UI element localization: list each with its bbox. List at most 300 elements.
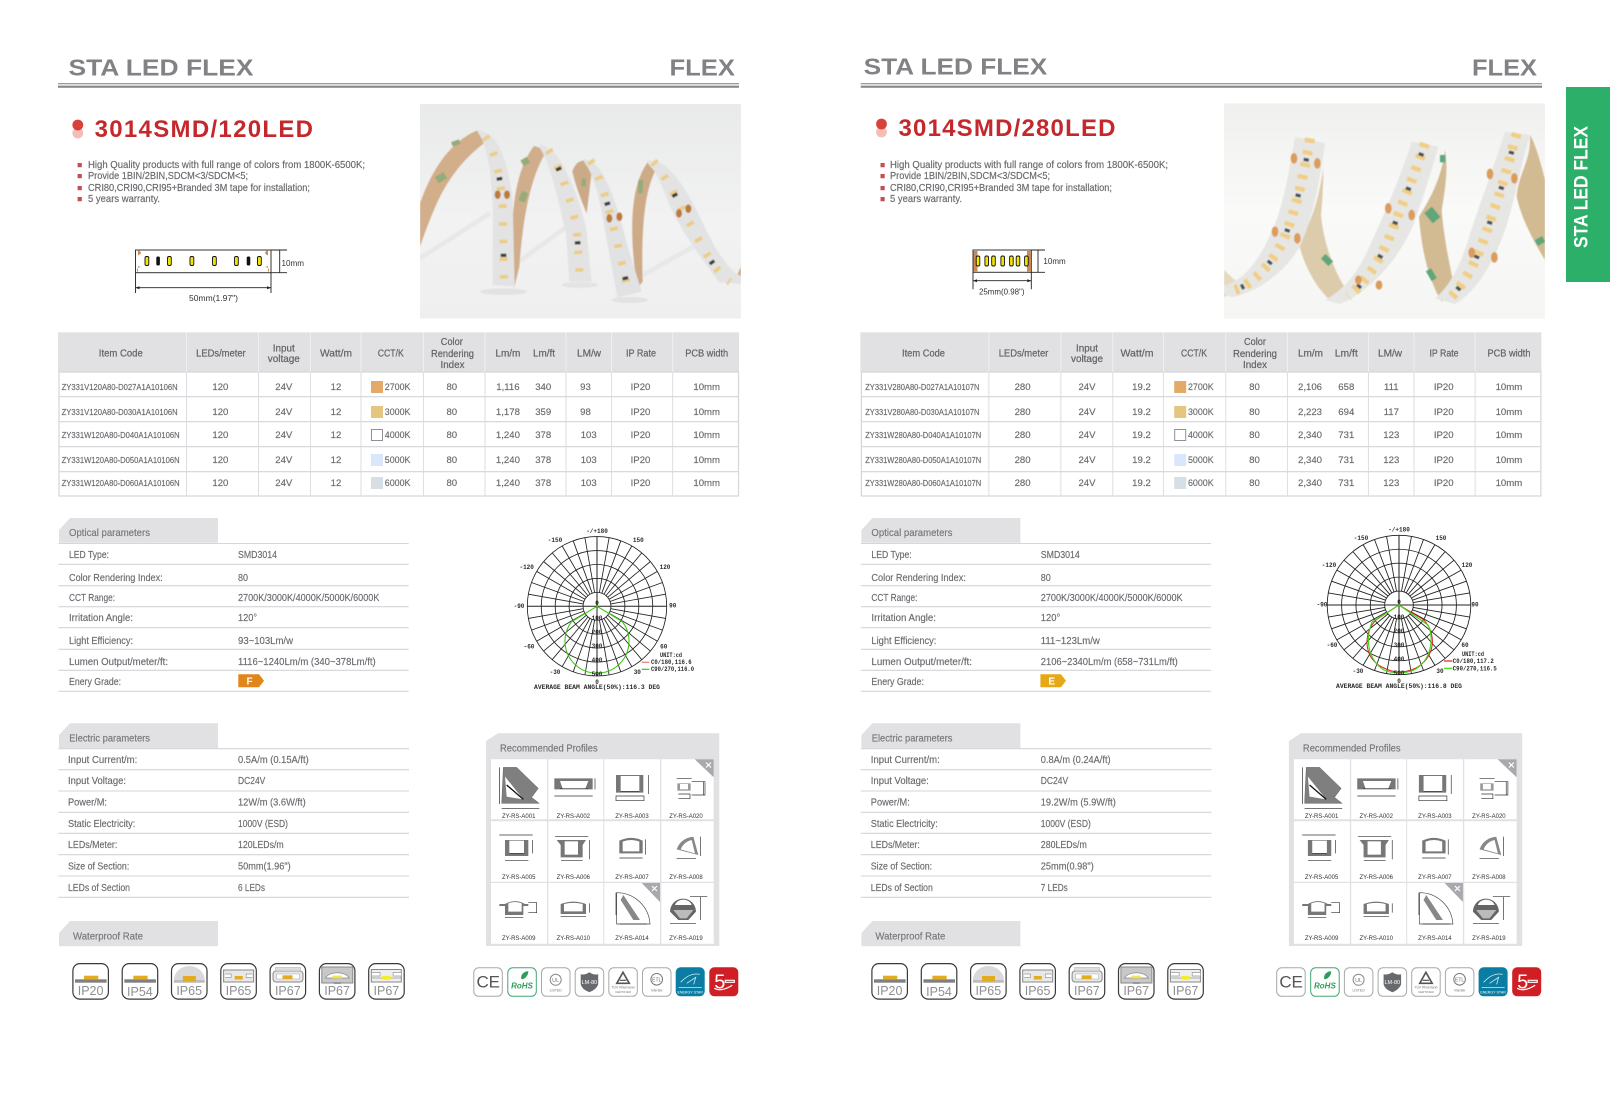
table row 2700K: 111 bbox=[1384, 382, 1399, 393]
icon: Energy Star: ENERGY STAR bbox=[677, 990, 703, 994]
page 1 feature bullet list: 5 years warranty. bbox=[88, 194, 160, 205]
profile ZY-RS-A003: ZY-RS-A003 bbox=[615, 814, 649, 820]
table row 6000K: 24V bbox=[275, 478, 293, 489]
page 2 feature bullet list: Provide 1BIN/2BIN,SDCM<3/SDCM<5; bbox=[890, 171, 1050, 182]
table row 6000K bbox=[62, 477, 720, 489]
page 2 polar light distribution chart: C0/180,117.2 bbox=[1453, 658, 1494, 665]
table row 6000K: 80 bbox=[1249, 478, 1260, 489]
table row 6000K: 12 bbox=[331, 478, 341, 489]
page 1 polar light distribution chart: 0 bbox=[595, 679, 599, 686]
icon: UL listed: UL bbox=[552, 978, 559, 984]
page 2 panel: optical parameters: 120° bbox=[1041, 613, 1060, 624]
page 2 polar light distribution chart: -/+180 bbox=[1388, 526, 1410, 534]
page 1 polar light distribution chart: -150 bbox=[548, 537, 563, 544]
page 2 certification icons bbox=[1277, 967, 1541, 996]
table header row: PCB width bbox=[685, 349, 728, 360]
icon: ETL: ETL bbox=[652, 977, 662, 983]
page 2 panel: electric parameters: Size of Section: bbox=[871, 862, 932, 873]
page 2 polar light distribution chart: 200 bbox=[1394, 628, 1405, 635]
table row 2700K: 120 bbox=[212, 382, 228, 393]
icon: UL listed: LISTED bbox=[550, 988, 562, 992]
page 1 polar light distribution chart: -60 bbox=[524, 644, 535, 650]
table header row: Lm/ft bbox=[533, 349, 555, 360]
table row 5000K: 280 bbox=[1015, 455, 1031, 466]
profile ZY-RS-A001 bbox=[1303, 767, 1342, 820]
page 1 IP rating icons bbox=[73, 964, 404, 999]
page 2 panel: electric parameters: DC24V bbox=[1041, 776, 1068, 787]
table row 6000K: 19.2 bbox=[1132, 478, 1151, 489]
table row 3000K: 694 bbox=[1338, 407, 1355, 418]
page 2 product photo: LED strip 280 bbox=[1224, 103, 1545, 319]
page 1 panel: optical parameters: CCT Range: bbox=[69, 593, 115, 604]
page 1 panel: optical parameters: 2700K/3000K/4000K/5000K/6000K bbox=[238, 593, 380, 604]
table row 4000K: 103 bbox=[581, 430, 597, 441]
page 2 strip section diagram 25mm: 25mm(0.98") bbox=[979, 286, 1025, 296]
energy grade badge F bbox=[238, 674, 264, 688]
page 2 waterproof rate heading bbox=[861, 921, 1020, 946]
table row 3000K: 10mm bbox=[693, 407, 720, 418]
icon: RoHS: RoHS bbox=[1314, 981, 1336, 990]
table header row: CCT/K bbox=[1181, 349, 1207, 360]
profile ZY-RS-A020 with not-suitable corner bbox=[669, 759, 714, 820]
table row 5000K: 12 bbox=[331, 455, 341, 466]
page 1 panel: electric parameters: 0.5A/m (0.15A/ft) bbox=[238, 755, 309, 766]
page 2 panel: optical parameters: CCT Range: bbox=[871, 593, 917, 604]
table row 4000K: 24V bbox=[1078, 430, 1096, 441]
icon: 5 year warranty bbox=[1512, 967, 1541, 996]
table row 6000K: 103 bbox=[581, 478, 597, 489]
icon: IP67 arc: IP67 bbox=[324, 984, 350, 998]
profile ZY-RS-A005 bbox=[1302, 835, 1339, 881]
page 2 panel: electric parameters: 19.2W/m (5.9W/ft) bbox=[1041, 798, 1116, 809]
page 2 polar light distribution chart: -90 bbox=[1317, 602, 1328, 608]
icon: ETL bbox=[1445, 968, 1474, 996]
profile ZY-RS-A010: ZY-RS-A010 bbox=[557, 936, 591, 942]
page 1 panel: electric parameters: LEDs of Section bbox=[68, 883, 130, 894]
page 2 panel: electric parameters: 25mm(0.98") bbox=[1041, 862, 1094, 873]
page 2 strip section diagram 25mm bbox=[973, 250, 1066, 296]
page 1 panel: optical parameters: SMD3014 bbox=[238, 550, 277, 561]
energy grade badge E bbox=[1040, 674, 1066, 688]
icon: IP67 channel: IP67 bbox=[1074, 984, 1100, 998]
profile ZY-RS-A005 bbox=[499, 835, 536, 881]
table row 4000K: 120 bbox=[212, 430, 228, 441]
icon: CE: E bbox=[489, 972, 500, 991]
profile ZY-RS-A014 with not-suitable corner: ZY-RS-A014 bbox=[615, 936, 649, 942]
table row 2700K: 2700K bbox=[1188, 382, 1214, 393]
page 2 panel: optical parameters: LED Type: bbox=[871, 550, 912, 561]
table row 5000K: 378 bbox=[535, 455, 551, 466]
table row 5000K: IP20 bbox=[1434, 455, 1454, 466]
table header row: voltage bbox=[1071, 354, 1103, 365]
icon: IP65 profile bbox=[1020, 964, 1055, 999]
page 1 panel: optical parameters: Lumen Output/meter/ft: bbox=[69, 657, 168, 668]
page 1 panel: electric parameters: Static Electricity: bbox=[68, 819, 135, 830]
icon: IP20 bbox=[73, 964, 108, 999]
icon: IP65 profile bbox=[221, 964, 256, 999]
page 2 panel: optical parameters: Irritation Angle: bbox=[871, 613, 936, 624]
profile ZY-RS-A008: ZY-RS-A008 bbox=[669, 875, 703, 881]
table row 6000K: 280 bbox=[1015, 478, 1031, 489]
profile ZY-RS-A003 bbox=[1418, 775, 1452, 820]
icon: TUV triangle: CERTIFIED bbox=[615, 990, 632, 994]
page 2 feature bullet list bbox=[880, 160, 1168, 205]
icon: IP65 dome: IP65 bbox=[975, 984, 1001, 998]
table row 3000K: 24V bbox=[275, 407, 293, 418]
page 1 polar light distribution chart: 400 bbox=[592, 657, 603, 664]
page 2 panel: electric parameters: 7 LEDs bbox=[1041, 883, 1068, 894]
page 1 panel: optical parameters: 1116~1240Lm/m (340~378Lm/ft) bbox=[238, 657, 376, 668]
page 1 polar light distribution chart: C0/180,116.6 bbox=[651, 659, 692, 666]
table row 3000K bbox=[865, 406, 1522, 418]
page 1 panel: optical parameters: LED Type: bbox=[69, 550, 109, 561]
profile ZY-RS-A009 bbox=[499, 901, 537, 942]
page 1 polar light distribution chart: 90 bbox=[669, 602, 677, 610]
table row 2700K: 80 bbox=[1249, 382, 1260, 393]
table row 3000K: 3000K bbox=[1188, 407, 1214, 418]
page 1 panel: recommended profiles: Recommended Profiles bbox=[500, 743, 598, 755]
page 2 panel: electric parameters: Power/M: bbox=[871, 798, 910, 809]
page 2 polar light distribution chart: -30 bbox=[1353, 668, 1364, 675]
table header row: LEDs/meter bbox=[999, 349, 1049, 360]
table row 6000K bbox=[865, 477, 1522, 489]
profile ZY-RS-A009: ZY-RS-A009 bbox=[502, 936, 536, 942]
page 2 panel: optical parameters: Lumen Output/meter/ft: bbox=[871, 657, 972, 668]
table row 3000K: 359 bbox=[535, 407, 551, 418]
page 2 polar light distribution chart: C90/270,116.5 bbox=[1453, 665, 1497, 672]
page 2 panel: electric parameters: Input Current/m: bbox=[871, 755, 940, 766]
icon: IP54: IP54 bbox=[127, 985, 153, 999]
table header row: Rendering bbox=[431, 349, 474, 360]
page 2 header: STA LED FLEX / FLEX bbox=[861, 54, 1542, 88]
table row 3000K: 280 bbox=[1015, 407, 1031, 418]
profile ZY-RS-A020 with not-suitable corner bbox=[1472, 759, 1517, 820]
icon: ETL: Intertek bbox=[651, 988, 663, 992]
icon: TUV triangle bbox=[609, 968, 637, 996]
page 2 panel: electric parameters bbox=[861, 723, 1211, 897]
page 1 polar light distribution chart: AVERAGE BEAM ANGLE(50%):116.3 DEG bbox=[534, 684, 660, 691]
page 2 panel: optical parameters: 111~123Lm/w bbox=[1041, 636, 1100, 647]
profile ZY-RS-A019: ZY-RS-A019 bbox=[1472, 936, 1506, 942]
profile ZY-RS-A010 bbox=[557, 902, 591, 942]
table row 2700K bbox=[62, 381, 720, 393]
table row 3000K: ZY331V280A80-D030A1A10107N bbox=[865, 407, 980, 417]
table row 5000K: ZY331W280A80-D050A1A10107N bbox=[865, 455, 981, 465]
table row 6000K: 6000K bbox=[1188, 478, 1214, 489]
table row 4000K: ZY331W280A80-D040A1A10107N bbox=[865, 430, 981, 440]
icon: CE: E bbox=[1292, 972, 1303, 991]
table header row: CCT/K bbox=[378, 349, 404, 360]
table row 2700K: 24V bbox=[1078, 382, 1096, 393]
table row 6000K: ZY331W280A80-D060A1A10107N bbox=[865, 478, 981, 488]
table row 2700K: 1,116 bbox=[496, 382, 520, 393]
table row 5000K: 123 bbox=[1383, 455, 1399, 466]
profile ZY-RS-A008 bbox=[669, 837, 703, 881]
table header row: Item Code bbox=[902, 349, 945, 360]
table row 4000K: 24V bbox=[275, 430, 293, 441]
page 1 polar light distribution chart: 0 bbox=[595, 600, 599, 607]
page 1 panel: electric parameters: LEDs/Meter: bbox=[68, 840, 117, 851]
page 2 feature bullet list: CRI80,CRI90,CRI95+Branded 3M tape for installation; bbox=[890, 183, 1112, 194]
page 1 product photo: LED strip 120 bbox=[420, 104, 741, 319]
profile ZY-RS-A001: ZY-RS-A001 bbox=[502, 814, 536, 820]
table row 2700K: 10mm bbox=[693, 382, 720, 393]
table row 2700K: 280 bbox=[1015, 382, 1031, 393]
page 2 panel: optical parameters: SMD3014 bbox=[1041, 550, 1080, 561]
icon: IP67 arc: IP67 bbox=[1123, 984, 1149, 998]
side tab: STA LED FLEX: STA LED FLEX bbox=[1569, 125, 1592, 248]
page 1 polar light distribution chart: 60 bbox=[660, 644, 668, 650]
page 2 polar light distribution chart: 400 bbox=[1394, 656, 1405, 663]
table row 3000K: 10mm bbox=[1496, 407, 1522, 418]
table header row: LM/w bbox=[1378, 349, 1402, 360]
table row 6000K: 378 bbox=[535, 478, 551, 489]
table row 5000K bbox=[865, 454, 1522, 466]
page 1 feature bullet list bbox=[78, 160, 365, 205]
page 2 panel: electric parameters: Static Electricity: bbox=[871, 819, 938, 830]
table row 6000K: 2,340 bbox=[1298, 478, 1322, 489]
icon: IP65 profile: IP65 bbox=[1025, 984, 1051, 998]
icon: IP67 box bbox=[1168, 964, 1203, 999]
table row 4000K: IP20 bbox=[631, 430, 650, 441]
profile ZY-RS-A003: ZY-RS-A003 bbox=[1418, 814, 1452, 820]
profile ZY-RS-A009: ZY-RS-A009 bbox=[1305, 936, 1339, 942]
table header row: Watt/m bbox=[1121, 349, 1154, 360]
profile ZY-RS-A002: ZY-RS-A002 bbox=[1359, 814, 1394, 820]
page 2 panel: electric parameters: 280LEDs/m bbox=[1041, 840, 1087, 851]
page 2 panel: recommended profiles bbox=[1289, 733, 1522, 946]
page 1 feature bullet list: High Quality products with full range of colors from 1800K-6500K; bbox=[88, 160, 365, 171]
table row 2700K: 93 bbox=[580, 382, 591, 393]
page 1 strip section diagram 50mm bbox=[136, 250, 304, 303]
page 2 panel: optical parameters: Light Efficiency: bbox=[871, 636, 936, 647]
icon: RoHS bbox=[1311, 968, 1339, 996]
page 1 product heading: 3014SMD/120LED bbox=[95, 116, 313, 143]
table row 3000K bbox=[62, 406, 720, 418]
page 2 spec table bbox=[860, 332, 1541, 496]
icon: UL listed bbox=[1344, 968, 1373, 996]
table row 4000K: 378 bbox=[535, 430, 551, 441]
page 1 header: STA LED FLEX / FLEX: STA LED FLEX bbox=[68, 55, 254, 81]
page 2 polar light distribution chart: 150 bbox=[1436, 535, 1447, 542]
table row 2700K: 2700K bbox=[385, 382, 411, 393]
icon: IP65 dome bbox=[172, 964, 207, 999]
table row 5000K: ZY331W120A80-D050A1A10106N bbox=[62, 455, 180, 465]
energy grade badge F: F bbox=[246, 676, 253, 688]
page 1 strip section diagram 50mm: 10mm bbox=[282, 258, 304, 268]
table row 4000K: 4000K bbox=[385, 430, 411, 441]
table row 3000K: 3000K bbox=[385, 407, 411, 418]
page 1 polar light distribution chart: 150 bbox=[633, 537, 644, 544]
page 1 panel: optical parameters: Light Efficiency: bbox=[69, 636, 133, 647]
page 1 polar light distribution chart: 200 bbox=[592, 629, 603, 636]
profile ZY-RS-A003 bbox=[615, 775, 649, 820]
table row 3000K: 117 bbox=[1384, 407, 1399, 418]
page 1 panel: electric parameters: 120LEDs/m bbox=[238, 840, 284, 851]
page 1 feature bullet list: Provide 1BIN/2BIN,SDCM<3/SDCM<5; bbox=[88, 171, 248, 182]
table header row: LM/w bbox=[577, 349, 601, 360]
page 2 polar light distribution chart: AVERAGE BEAM ANGLE(50%):116.8 DEG bbox=[1336, 683, 1462, 690]
icon: CE: C bbox=[1279, 972, 1292, 991]
page 1 polar light distribution chart: 500 bbox=[592, 671, 603, 678]
table header row: Index bbox=[440, 360, 465, 371]
page 1 waterproof rate heading bbox=[59, 921, 218, 946]
profile ZY-RS-A020 with not-suitable corner: ZY-RS-A020 bbox=[1472, 814, 1506, 820]
table row 4000K: 1,240 bbox=[496, 430, 520, 441]
table header row: Index bbox=[1243, 360, 1268, 371]
page 1 header: STA LED FLEX / FLEX: FLEX bbox=[670, 55, 736, 81]
page 1 panel: optical parameters: 93~103Lm/w bbox=[238, 636, 294, 647]
table row 4000K: 12 bbox=[331, 430, 341, 441]
page 1 panel: optical parameters: Enery Grade: bbox=[69, 677, 121, 688]
icon: IP20: IP20 bbox=[78, 984, 104, 998]
table header row: PCB width bbox=[1488, 349, 1531, 360]
icon: IP20: IP20 bbox=[877, 984, 903, 998]
page 1 panel: recommended profiles bbox=[486, 733, 719, 946]
page 2 panel: electric parameters: 1000V (ESD) bbox=[1041, 819, 1091, 830]
page 1 spec table bbox=[58, 332, 739, 496]
table row 3000K: 1,178 bbox=[496, 407, 520, 418]
icon: RoHS: RoHS bbox=[511, 981, 534, 990]
icon: UL listed bbox=[542, 968, 570, 996]
page 1 panel: electric parameters: Power/M: bbox=[68, 798, 107, 809]
table row 3000K: 24V bbox=[1078, 407, 1096, 418]
table row 3000K: 80 bbox=[446, 407, 457, 418]
icon: Energy Star bbox=[676, 967, 705, 996]
table row 3000K: IP20 bbox=[1434, 407, 1454, 418]
profile ZY-RS-A002: ZY-RS-A002 bbox=[557, 814, 591, 820]
table row 5000K: 5000K bbox=[1188, 455, 1214, 466]
page 2 header: STA LED FLEX / FLEX: STA LED FLEX bbox=[864, 54, 1048, 80]
icon: IP65 dome: IP65 bbox=[176, 984, 202, 998]
icon: RoHS bbox=[508, 968, 536, 996]
page 1 polar light distribution chart bbox=[514, 528, 694, 691]
page 2 panel: electric parameters: LEDs of Section bbox=[871, 883, 933, 894]
icon: IP54 bbox=[921, 964, 957, 999]
table row 2700K: 19.2 bbox=[1132, 382, 1151, 393]
table row 2700K bbox=[865, 381, 1522, 393]
table row 6000K: 120 bbox=[212, 478, 228, 489]
page 1 panel: electric parameters: 50mm(1.96") bbox=[238, 862, 291, 873]
profile ZY-RS-A007 bbox=[615, 838, 649, 881]
table row 5000K: 80 bbox=[446, 455, 457, 466]
profile ZY-RS-A009 bbox=[1302, 901, 1340, 942]
page 2 polar light distribution chart: 120 bbox=[1462, 562, 1473, 569]
icon: IP67 channel bbox=[1069, 964, 1105, 999]
page 2 product heading: 3014SMD/280LED bbox=[898, 115, 1116, 142]
table row 5000K: 2,340 bbox=[1298, 455, 1322, 466]
table row 5000K: 731 bbox=[1338, 455, 1354, 466]
table row 6000K: 10mm bbox=[693, 478, 720, 489]
table row 5000K: IP20 bbox=[631, 455, 650, 466]
table row 6000K: 6000K bbox=[385, 478, 411, 489]
page 1 polar light distribution chart: -/+180 bbox=[586, 528, 608, 535]
table row 6000K: 1,240 bbox=[496, 478, 520, 489]
page 1 panel: electric parameters: DC24V bbox=[238, 776, 265, 787]
table row 4000K: 10mm bbox=[1496, 430, 1522, 441]
table header row: LEDs/meter bbox=[196, 349, 246, 360]
energy grade badge E: E bbox=[1048, 676, 1055, 688]
page 1 panel: electric parameters bbox=[58, 723, 409, 897]
profile ZY-RS-A014 with not-suitable corner bbox=[1418, 883, 1463, 942]
page 1 panel: optical parameters bbox=[58, 518, 409, 691]
table row 5000K: 120 bbox=[212, 455, 228, 466]
page 2 polar light distribution chart: -150 bbox=[1354, 535, 1369, 542]
icon: ETL bbox=[642, 968, 671, 996]
table header row: Input bbox=[1076, 343, 1098, 354]
page 1 panel: optical parameters: 120° bbox=[238, 613, 257, 624]
table row 5000K: 10mm bbox=[1496, 455, 1522, 466]
table row 4000K bbox=[865, 430, 1522, 441]
table header row bbox=[902, 337, 1531, 371]
table row 4000K: 2,340 bbox=[1298, 430, 1322, 441]
table row 6000K: 80 bbox=[446, 478, 457, 489]
page 2 polar light distribution chart: UNIT:cd bbox=[1462, 651, 1484, 658]
icon: IP67 channel bbox=[270, 964, 306, 999]
profile ZY-RS-A001 bbox=[500, 767, 539, 820]
profile ZY-RS-A001: ZY-RS-A001 bbox=[1305, 814, 1339, 820]
page 1 strip section diagram 50mm: 50mm(1.97") bbox=[189, 293, 238, 303]
profile ZY-RS-A019: ZY-RS-A019 bbox=[669, 936, 703, 942]
icon: Energy Star: ENERGY STAR bbox=[1480, 990, 1506, 994]
page 2 polar light distribution chart: 500 bbox=[1394, 670, 1405, 677]
icon: ETL: ETL bbox=[1455, 977, 1464, 983]
profile ZY-RS-A002 bbox=[1357, 778, 1398, 820]
page 1 polar light distribution chart: 30 bbox=[634, 669, 641, 676]
table row 3000K: 12 bbox=[331, 407, 341, 418]
page 2 polar light distribution chart: -120 bbox=[1322, 562, 1337, 569]
table row 6000K: 10mm bbox=[1496, 478, 1522, 489]
table row 5000K: 5000K bbox=[385, 455, 411, 466]
page 1 panel: optical parameters: Irritation Angle: bbox=[69, 613, 133, 624]
table row 6000K: IP20 bbox=[1434, 478, 1454, 489]
table row 2700K: 658 bbox=[1338, 382, 1354, 393]
table row 3000K: IP20 bbox=[631, 407, 650, 418]
profile ZY-RS-A014 with not-suitable corner: ZY-RS-A014 bbox=[1418, 936, 1452, 942]
page 2 panel: optical parameters: 80 bbox=[1041, 573, 1051, 584]
profile ZY-RS-A008: ZY-RS-A008 bbox=[1472, 875, 1506, 881]
page 2 polar light distribution chart: 30 bbox=[1436, 668, 1444, 675]
table row 4000K: 19.2 bbox=[1132, 430, 1151, 441]
page 2 polar light distribution chart bbox=[1317, 526, 1497, 690]
table row 2700K: IP20 bbox=[631, 382, 650, 393]
profile ZY-RS-A007: ZY-RS-A007 bbox=[615, 875, 649, 881]
page 2 polar light distribution chart: 300 bbox=[1394, 642, 1405, 649]
page 1 panel: optical parameters: 80 bbox=[238, 573, 248, 584]
table row 3000K: 19.2 bbox=[1132, 407, 1151, 418]
page 1 polar light distribution chart: 300 bbox=[592, 643, 603, 650]
icon: IP67 box: IP67 bbox=[374, 984, 399, 998]
table row 4000K: 80 bbox=[1249, 430, 1260, 441]
profile ZY-RS-A006 bbox=[555, 837, 591, 881]
table row 3000K: ZY331V120A80-D030A1A10106N bbox=[62, 407, 178, 417]
table header row: Color bbox=[1244, 337, 1266, 348]
page 2 panel: recommended profiles: Recommended Profiles bbox=[1303, 743, 1401, 755]
table row 5000K bbox=[62, 454, 720, 466]
profile ZY-RS-A002 bbox=[554, 778, 595, 820]
table row 5000K: 19.2 bbox=[1132, 455, 1151, 466]
icon: CE bbox=[1277, 968, 1305, 996]
page 1 polar light distribution chart: C90/270,116.0 bbox=[651, 666, 694, 673]
icon: 5 year warranty bbox=[709, 967, 738, 996]
page 1 feature bullet list: CRI80,CRI90,CRI95+Branded 3M tape for installation; bbox=[88, 183, 310, 194]
table row 6000K: 24V bbox=[1078, 478, 1096, 489]
page 2 panel: electric parameters: LEDs/Meter: bbox=[871, 840, 920, 851]
icon: IP67 arc bbox=[319, 964, 355, 999]
table row 4000K: 80 bbox=[446, 430, 457, 441]
page 1 panel: optical parameters: Color Rendering Index: bbox=[69, 573, 163, 584]
page 2 polar light distribution chart: 60 bbox=[1461, 642, 1469, 649]
